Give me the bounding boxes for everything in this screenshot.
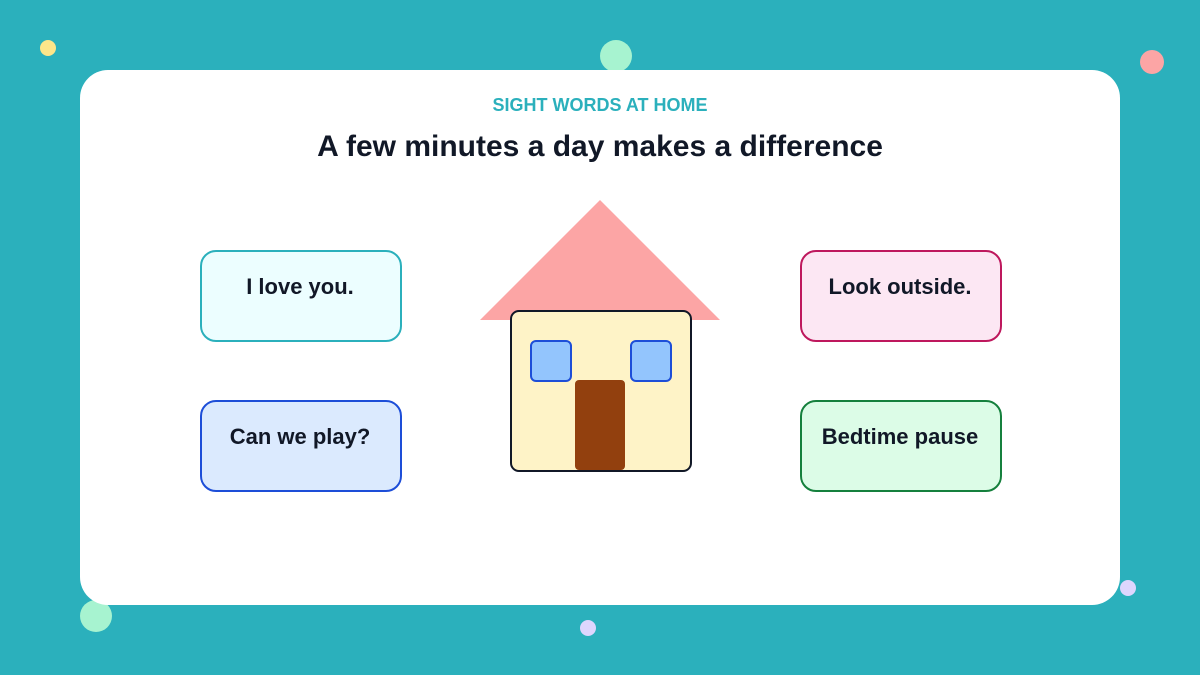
sentence card: I love you.: I love you.	[246, 274, 354, 299]
title: A few minutes a day makes a difference	[317, 130, 883, 163]
sentence card: Can we play?: Can we play?	[230, 424, 370, 449]
illustration: house	[480, 200, 720, 472]
decorative dot: coral top right	[1140, 50, 1164, 74]
decorative dot: mint bottom left	[80, 600, 112, 632]
panel: white card	[80, 70, 1120, 605]
sentence card: Look outside.: Look outside.	[828, 274, 972, 299]
decorative dot: yellow top left	[40, 40, 56, 56]
sentence card: I love you.	[200, 250, 402, 342]
sentence card: Bedtime pause: Bedtime pause	[822, 424, 978, 449]
sentence card: Look outside.	[800, 250, 1002, 342]
left window	[531, 341, 571, 381]
decorative dot: mint top center	[600, 40, 632, 72]
eyebrow heading: SIGHT WORDS AT HOME	[492, 95, 708, 115]
right window	[631, 341, 671, 381]
house body	[511, 311, 691, 471]
decorative dot: lavender bottom right	[1120, 580, 1136, 596]
decorative dot: lavender bottom center	[580, 620, 596, 636]
sentence card: Can we play?	[200, 400, 402, 492]
sentence card: Bedtime pause	[800, 400, 1002, 492]
door	[575, 380, 625, 470]
house roof	[480, 200, 720, 320]
